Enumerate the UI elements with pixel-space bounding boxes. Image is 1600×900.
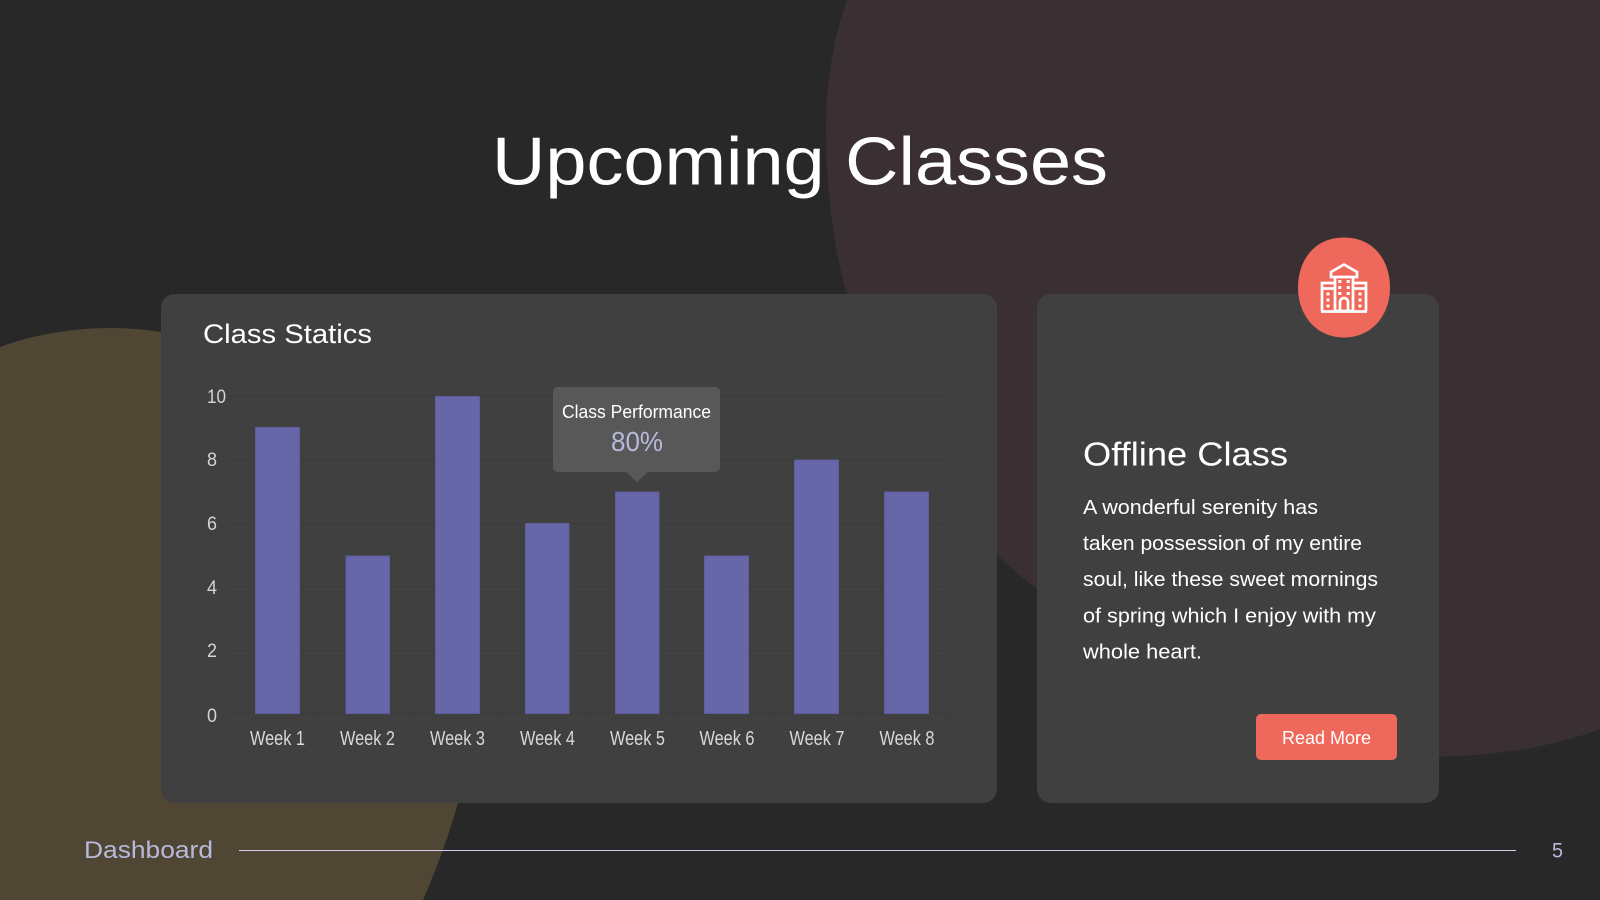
body text: [1082, 496, 1378, 664]
x axis labels: Week 6: [700, 728, 754, 750]
x axis labels: Week 4: [520, 728, 575, 750]
x axis labels: Week 5: [610, 728, 665, 750]
footer rule: [239, 850, 1516, 851]
x axis labels: Week 2: [340, 728, 395, 750]
bars: [256, 396, 928, 714]
button: read more: Read More: [1282, 727, 1371, 748]
background blob: olive: [0, 328, 479, 900]
tooltip: class performance: 80%: [611, 426, 663, 457]
x axis labels: Week 1: [250, 728, 305, 750]
page number: 5: [1552, 840, 1563, 862]
y axis labels: 2: [207, 641, 217, 662]
y axis labels: 4: [207, 578, 217, 599]
title: Upcoming Classes: [492, 124, 1108, 200]
heading: offline class: Offline Class: [1083, 436, 1288, 472]
tooltip: class performance: [553, 387, 720, 482]
panel heading: class statics: Class Statics: [203, 319, 372, 349]
body text: of spring which I enjoy with my: [1083, 604, 1377, 628]
icon: building on coral circle: [1298, 238, 1390, 338]
body text: taken possession of my entire: [1083, 532, 1362, 555]
x axis labels: Week 3: [430, 728, 485, 750]
body text: A wonderful serenity has: [1083, 496, 1318, 519]
panel: class statics chart: [161, 294, 997, 803]
x axis labels: Week 8: [880, 728, 934, 750]
y axis labels: 6: [207, 514, 217, 535]
y axis labels: 8: [207, 450, 217, 471]
button: read more: [1256, 714, 1397, 760]
y axis labels: 10: [207, 387, 226, 408]
tooltip: class performance: Class Performance: [562, 401, 711, 422]
body text: whole heart.: [1082, 640, 1202, 664]
x axis labels: Week 7: [790, 728, 844, 750]
background blob: maroon: [826, 0, 1600, 757]
y axis labels: 0: [207, 706, 217, 727]
x axis labels: [250, 728, 934, 750]
body text: soul, like these sweet mornings: [1083, 568, 1378, 591]
panel: offline class: [1037, 294, 1439, 803]
y axis labels: [207, 387, 226, 727]
footer label: dashboard: Dashboard: [84, 837, 213, 864]
bar chart: [207, 387, 951, 750]
